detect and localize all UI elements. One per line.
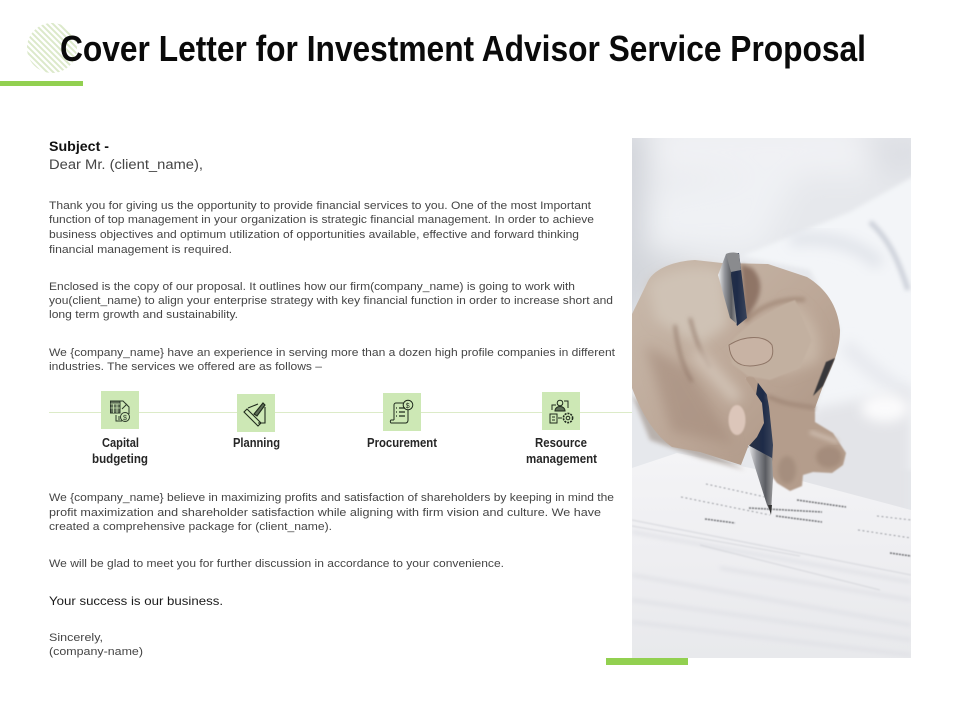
lower fingers	[745, 372, 846, 491]
title accent bar	[0, 81, 83, 86]
text block: salutation: Dear Mr. (client_name),	[49, 157, 203, 172]
text block: paragraph 1	[49, 200, 594, 256]
text block: paragraph 3: industries. The services we offered are as follows –	[49, 361, 323, 373]
text block: paragraph 1: Thank you for giving us the opportunity to provide financial services to you. One of the most Important	[49, 200, 591, 212]
text block: paragraph 1: financial management is required.	[49, 244, 232, 256]
paper	[632, 453, 911, 557]
photo: hand signing a document with a pen	[632, 138, 911, 658]
icon: ruler and pencil	[244, 403, 265, 426]
photo accent bar	[606, 658, 688, 665]
text block: paragraph 4	[49, 492, 614, 533]
table and right background	[817, 400, 911, 471]
blurred backdrop	[632, 138, 847, 313]
text block: paragraph 2: you(client_name) to align your enterprise strategy with key financial function in order to increase short and	[49, 295, 613, 307]
hand	[632, 260, 840, 465]
text block: tagline: Your success is our business.	[49, 594, 223, 608]
text block: paragraph 4: created a comprehensive package for (client_name).	[49, 521, 332, 533]
service: procurement	[367, 393, 438, 450]
service: planning: Planning	[233, 435, 280, 450]
text block: paragraph 1: business objectives and optimum utilization of opportunities available, effective and forward thinking	[49, 229, 579, 241]
text block: paragraph 3: We {company_name} have an experience in serving more than a dozen high profile companies in different	[49, 347, 615, 359]
text block: paragraph 2	[49, 281, 613, 321]
icon: person, document and gear	[550, 400, 573, 423]
text block: paragraph 2: Enclosed is the copy of our proposal. It outlines how our firm(company_name) is going to work with	[49, 281, 575, 293]
service: resource management: Resource	[535, 435, 587, 450]
title: Cover Letter for Investment Advisor Service Proposal	[60, 28, 866, 69]
text block: salutation	[49, 139, 203, 172]
pen lower tip	[748, 445, 773, 515]
text block: paragraph 5: We will be glad to meet you for further discussion in accordance to your convenience.	[49, 558, 504, 570]
service: resource management	[526, 392, 598, 466]
service: capital budgeting: Capital	[102, 435, 139, 450]
shadow under hand	[632, 395, 745, 470]
icon: calculator and dollar document: $	[123, 415, 127, 422]
service: capital budgeting: budgeting	[92, 451, 148, 466]
text block: paragraph 3	[49, 347, 615, 373]
service: resource management: management	[526, 451, 598, 466]
service: planning	[233, 394, 280, 450]
text block: paragraph 4: We {company_name} believe in maximizing profits and satisfaction of shareholders by keeping in mind the	[49, 492, 614, 504]
icon: invoice with dollar: $	[406, 403, 410, 410]
pen upper	[718, 252, 747, 326]
text block: salutation: Subject -	[49, 139, 109, 154]
text block: paragraph 1: function of top management in your organization is strategic financial management. In order to achieve	[49, 214, 594, 226]
services timeline line	[49, 412, 632, 413]
text block: sign-off	[49, 632, 143, 658]
service: procurement: Procurement	[367, 435, 438, 450]
decorative hatched circle	[27, 23, 77, 73]
text block: paragraph 4: profit maximization and shareholder satisfaction while aligning with firm vision and culture. We have	[49, 507, 601, 519]
service: capital budgeting	[92, 391, 148, 466]
text block: sign-off: (company-name)	[49, 646, 143, 658]
text block: paragraph 2: long term growth and sustainability.	[49, 309, 238, 321]
shirt sleeve	[750, 178, 911, 406]
pen lower body	[748, 382, 773, 462]
text block: sign-off: Sincerely,	[49, 632, 103, 644]
thumb	[728, 300, 796, 380]
